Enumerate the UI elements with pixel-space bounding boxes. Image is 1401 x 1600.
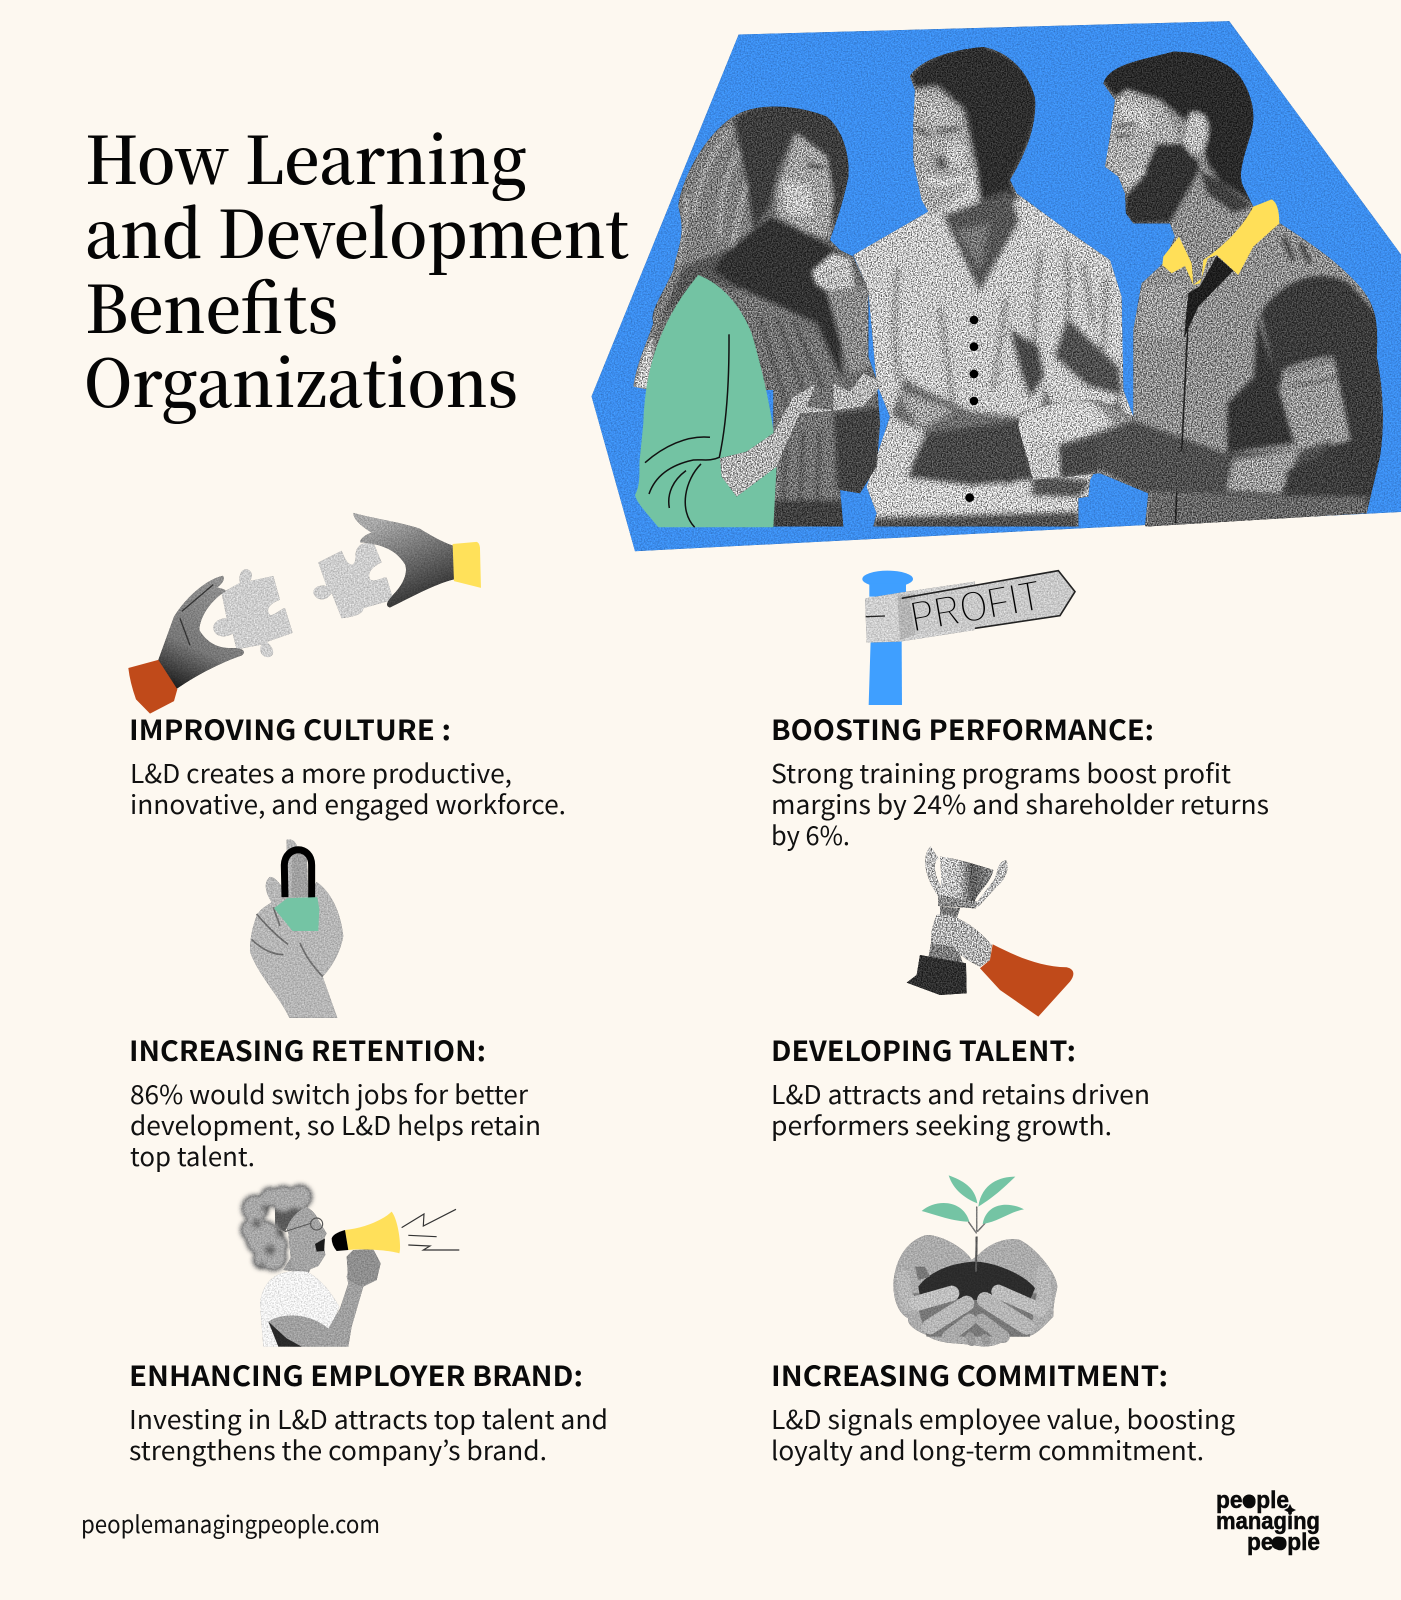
body text: Investing in L&D attracts top talent and bbox=[129, 1400, 608, 1437]
green sleeve bbox=[635, 275, 777, 527]
heading: ENHANCING EMPLOYER BRAND: bbox=[129, 1355, 583, 1395]
body text bbox=[771, 1400, 1235, 1468]
body text: top talent. bbox=[130, 1137, 255, 1174]
heading: DEVELOPING TALENT: bbox=[771, 1030, 1076, 1070]
panel: increasing retention bbox=[129, 839, 541, 1174]
body text: 86% would switch jobs for better bbox=[130, 1075, 529, 1112]
icon: hand holding padlock bbox=[250, 839, 343, 1018]
title: Benefits bbox=[85, 257, 338, 352]
panel: increasing commitment bbox=[771, 1175, 1235, 1468]
body text bbox=[130, 754, 566, 822]
icon: hands with puzzle pieces bbox=[128, 513, 481, 714]
body text: Strong training programs boost profit bbox=[771, 754, 1231, 791]
body text bbox=[771, 1075, 1150, 1143]
panel: enhancing employer brand bbox=[129, 1184, 608, 1468]
heading: INCREASING RETENTION: bbox=[129, 1030, 486, 1070]
footer url: peoplemanagingpeople.com bbox=[81, 1505, 380, 1540]
body text: L&D attracts and retains driven bbox=[771, 1075, 1150, 1112]
title: How Learning bbox=[85, 108, 527, 203]
icon: profit signpost: PROFIT bbox=[907, 571, 1045, 642]
logo: people managing people: people bbox=[1216, 1487, 1289, 1514]
body text: L&D creates a more productive, bbox=[130, 754, 512, 791]
hero: three colleagues on blue polygon bbox=[592, 21, 1401, 551]
panel: developing talent bbox=[771, 847, 1150, 1143]
body text: by 6%. bbox=[771, 816, 850, 853]
title: Organizations bbox=[84, 331, 518, 426]
body text: performers seeking growth. bbox=[771, 1106, 1112, 1143]
heading: IMPROVING CULTURE : bbox=[129, 709, 451, 749]
body text: L&D signals employee value, boosting bbox=[771, 1400, 1235, 1437]
title bbox=[84, 108, 629, 426]
panel: boosting performance bbox=[771, 571, 1269, 853]
icon: profit signpost bbox=[862, 571, 1075, 705]
body text: innovative, and engaged workforce. bbox=[130, 785, 566, 822]
logo: people managing people: managing bbox=[1216, 1508, 1320, 1535]
heading: BOOSTING PERFORMANCE: bbox=[771, 709, 1154, 749]
body text bbox=[771, 754, 1269, 853]
body text: margins by 24% and shareholder returns bbox=[771, 785, 1269, 822]
panel: improving culture bbox=[128, 513, 566, 822]
icon: woman with megaphone bbox=[240, 1184, 459, 1347]
body text: development, so L&D helps retain bbox=[130, 1106, 541, 1143]
people photo bbox=[630, 43, 1390, 530]
heading: INCREASING COMMITMENT: bbox=[771, 1355, 1168, 1395]
logo: people managing people bbox=[1216, 1487, 1320, 1556]
body text bbox=[130, 1075, 541, 1174]
icon: hand holding trophy bbox=[907, 847, 1073, 1017]
logo: people managing people: people bbox=[1247, 1529, 1320, 1556]
body text: loyalty and long-term commitment. bbox=[771, 1431, 1204, 1468]
body text: strengthens the company’s brand. bbox=[129, 1431, 547, 1468]
body text bbox=[129, 1400, 608, 1468]
icon: cupped hands with seedling bbox=[893, 1175, 1057, 1347]
title: and Development bbox=[85, 182, 629, 277]
blue polygon background bbox=[592, 21, 1401, 551]
yellow collar bbox=[1162, 199, 1279, 285]
